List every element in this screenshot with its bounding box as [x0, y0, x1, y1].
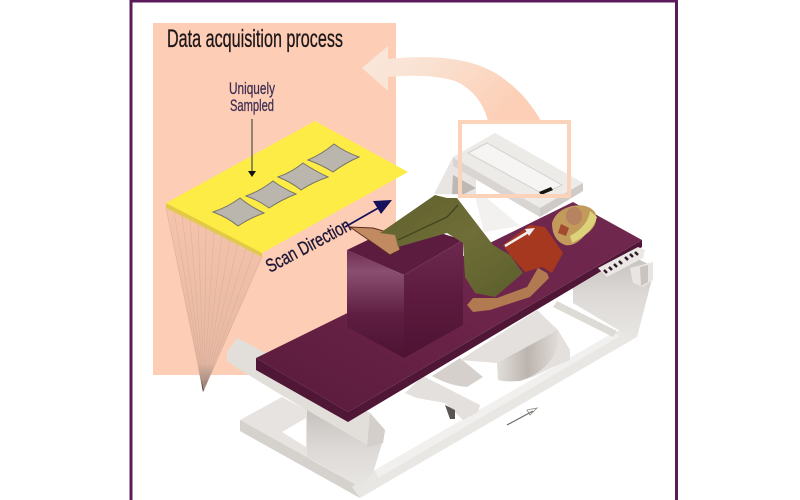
scanner slot	[539, 187, 553, 195]
sampled region 2	[246, 181, 296, 208]
title: Data acquisition process	[167, 25, 343, 53]
patient	[350, 195, 597, 312]
arrow: pointer to sampled region	[248, 119, 256, 177]
white arrow on torso	[505, 228, 535, 246]
right arm	[630, 262, 653, 287]
lower arm and hand	[467, 268, 549, 312]
scanner housing	[453, 133, 583, 217]
head and hair	[552, 205, 597, 245]
machine base	[227, 255, 653, 498]
trousers	[380, 195, 523, 297]
label: uniquely sampled: Uniquely	[229, 79, 275, 98]
front cross arm	[227, 338, 385, 447]
control panel	[598, 247, 645, 277]
panel: data acquisition background	[153, 23, 396, 375]
arrow: curved arrow from scanner to panel	[362, 46, 541, 121]
page frame	[131, 1, 676, 500]
base left section	[240, 397, 360, 498]
right pedestal	[573, 255, 653, 337]
long front rail	[352, 325, 637, 498]
lower disc	[432, 358, 483, 387]
torso shirt	[503, 225, 563, 273]
label: scan direction: Scan Direction	[262, 215, 354, 277]
cross bar	[405, 376, 480, 420]
patient table	[256, 202, 642, 422]
sampled region 3	[278, 163, 328, 190]
label: uniquely sampled: Sampled	[230, 96, 274, 115]
leg support block	[347, 222, 463, 358]
half disc	[460, 310, 570, 381]
black slot	[445, 405, 455, 419]
scan fan cone	[165, 205, 263, 392]
scanner window	[468, 143, 562, 194]
cross arm end cap	[367, 413, 385, 447]
sampled region 1	[213, 198, 264, 226]
scanner beam	[475, 197, 520, 232]
arrow: scan direction	[345, 200, 392, 227]
left pedestal	[307, 410, 383, 487]
arrow: small motion arrow	[507, 408, 537, 425]
yellow sampled plane	[166, 121, 408, 257]
scanner head assembly	[434, 133, 583, 232]
rear rail	[553, 301, 617, 337]
sampled region 4	[308, 144, 359, 172]
highlight rectangle around scanner	[460, 122, 569, 196]
foot and sandals	[350, 227, 400, 255]
label: uniquely sampled	[229, 79, 275, 115]
scanner arm	[434, 157, 476, 195]
